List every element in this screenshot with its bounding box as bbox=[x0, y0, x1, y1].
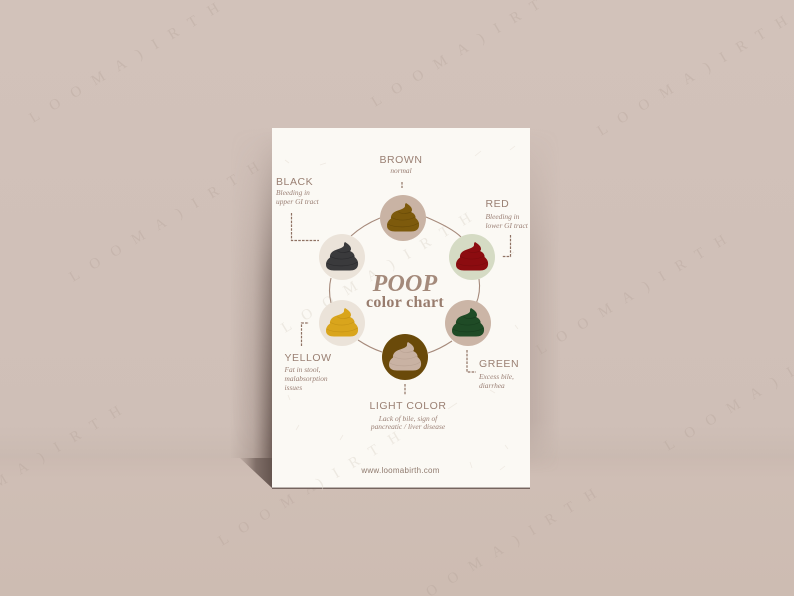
label: green: diarrhea bbox=[479, 381, 505, 390]
label: yellow bbox=[284, 352, 332, 392]
label: red: Bleeding in bbox=[486, 212, 520, 221]
poster bottom edge bbox=[272, 488, 530, 489]
label: yellow: issues bbox=[284, 383, 302, 392]
icon: light color poop bbox=[382, 334, 428, 380]
label: black: BLACK bbox=[276, 176, 313, 188]
label: green: Excess bile, bbox=[478, 372, 514, 381]
watermark on poster bbox=[279, 203, 486, 491]
label: light color: Lack of bile, sign of bbox=[378, 414, 438, 423]
paper speckles bbox=[285, 146, 518, 470]
label: black: upper GI tract bbox=[276, 197, 320, 206]
watermarks on background: LOOMA)IRTH bbox=[534, 225, 741, 358]
connecting ring bbox=[330, 217, 480, 353]
watermarks on background: LOOMA)IRTH bbox=[216, 416, 423, 549]
label: yellow: Fat in stool, bbox=[284, 365, 321, 374]
leader lines bbox=[292, 182, 510, 395]
title: color chart bbox=[366, 294, 444, 311]
label: light color: pancreatic / liver disease bbox=[370, 422, 446, 431]
label: black bbox=[276, 176, 320, 206]
watermark on poster: )IRTH bbox=[314, 422, 415, 491]
title: POOP bbox=[372, 271, 438, 297]
watermarks on background: LOOMA)IRTH bbox=[67, 152, 274, 285]
label: red: lower GI tract bbox=[486, 221, 529, 230]
watermark on poster: LOOMA)IRTH bbox=[279, 203, 486, 336]
website: www.loomabirth.com bbox=[360, 466, 440, 475]
background: floor bbox=[0, 458, 794, 596]
label: green bbox=[478, 358, 519, 390]
poster sheet bbox=[272, 128, 530, 488]
background: wall bbox=[0, 0, 794, 458]
label: yellow: malabsorption bbox=[284, 374, 328, 383]
label: yellow: YELLOW bbox=[284, 352, 332, 364]
label: black: Bleeding in bbox=[276, 188, 310, 197]
label: light color: LIGHT COLOR bbox=[369, 400, 447, 412]
label: green: GREEN bbox=[479, 358, 519, 370]
icon: red poop bbox=[449, 234, 495, 280]
title bbox=[366, 271, 444, 311]
label: brown: BROWN bbox=[380, 154, 422, 166]
poster bbox=[272, 128, 530, 491]
icon: brown poop bbox=[380, 195, 426, 241]
label: brown: normal bbox=[390, 166, 412, 175]
label: brown bbox=[380, 154, 422, 175]
poster shadow: left wall bbox=[237, 147, 272, 458]
icon: black poop bbox=[319, 234, 365, 280]
poster shadow: floor bbox=[240, 458, 272, 488]
label: light color bbox=[369, 400, 447, 431]
icon: yellow poop bbox=[319, 300, 365, 346]
label: red: RED bbox=[486, 198, 509, 210]
label: red bbox=[486, 198, 529, 230]
icon: green poop bbox=[445, 300, 491, 346]
poster shadow: right wall bbox=[530, 180, 548, 449]
